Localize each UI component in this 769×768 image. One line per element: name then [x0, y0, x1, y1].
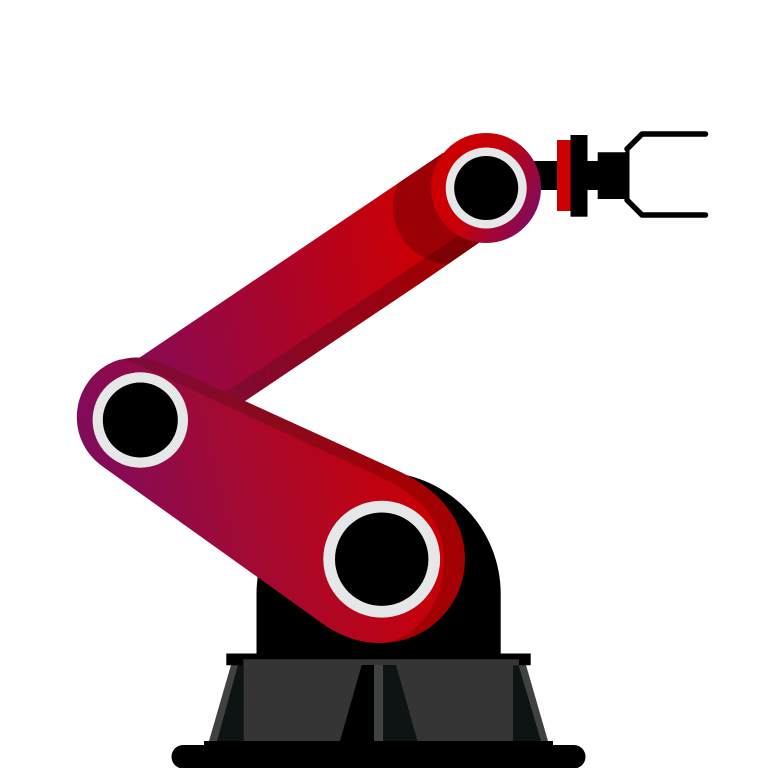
base left panel — [244, 665, 362, 741]
lower arm body — [77, 360, 444, 643]
lower claw — [627, 200, 706, 215]
centre black wedge — [340, 665, 374, 741]
robot base — [172, 472, 586, 768]
elbow ring — [93, 372, 188, 468]
gripper block — [598, 149, 630, 202]
wrist joint — [431, 133, 541, 243]
shoulder hub — [335, 512, 428, 606]
base side wedge: left dark — [217, 665, 244, 741]
connecting rod — [530, 161, 598, 190]
wrist hub — [454, 156, 518, 220]
elbow hub — [103, 382, 178, 458]
upper arm shade near wrist — [393, 153, 458, 258]
upper arm underside band — [226, 235, 490, 401]
upper arm — [139, 153, 480, 401]
band shade near wrist — [425, 236, 479, 264]
tower — [256, 472, 501, 654]
base right panel — [396, 665, 513, 741]
red collar — [557, 140, 571, 211]
base side wedge: right dark — [513, 665, 541, 741]
foot bar — [172, 745, 586, 768]
shoulder ring — [323, 501, 440, 618]
lower arm — [77, 357, 465, 643]
lower plate — [204, 741, 553, 747]
upper arm body — [139, 153, 520, 420]
gripper — [530, 134, 706, 217]
black collar — [570, 135, 588, 217]
base side panel: left light edge — [209, 665, 244, 741]
infographic: robot arm — [76, 131, 708, 768]
flange — [226, 654, 531, 665]
centre dark wedge — [383, 665, 418, 741]
upper claw — [627, 134, 706, 149]
wrist outer — [431, 133, 541, 243]
wrist ring — [446, 148, 527, 228]
base top strip — [244, 659, 519, 666]
lower arm dark band and shoulder shade — [77, 357, 465, 643]
base side panel: right light edge — [513, 665, 548, 741]
centre strip — [374, 665, 383, 741]
